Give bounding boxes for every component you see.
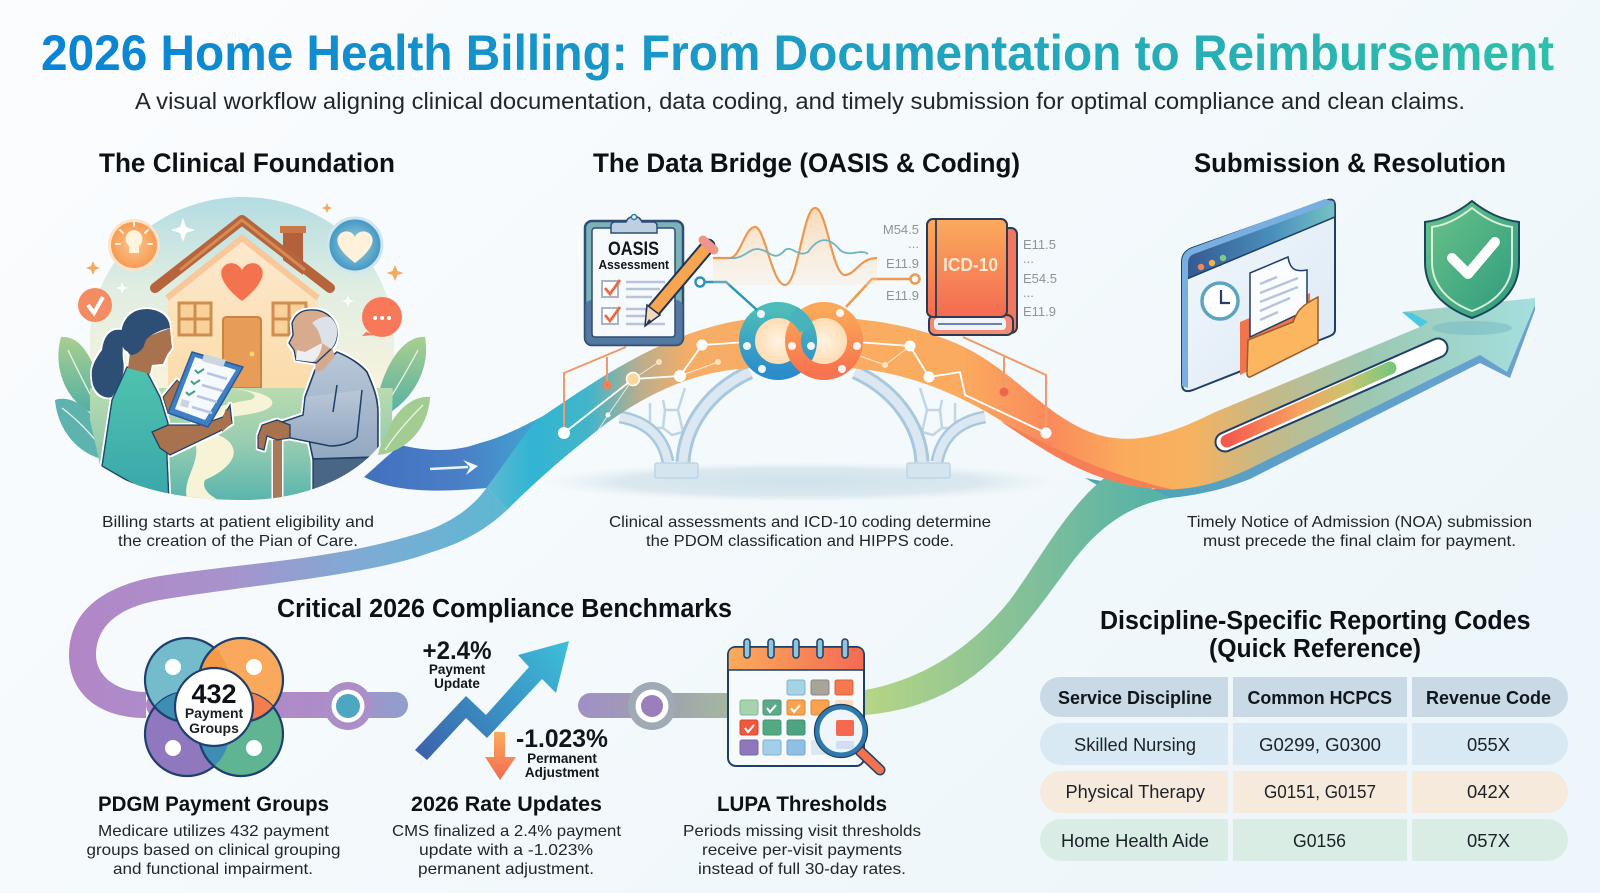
purple connector bar with node: [146, 682, 408, 730]
heading: clinical foundation: The Clinical Foundation: [99, 148, 395, 178]
flow ribbon: from clinical foundation: [364, 415, 545, 491]
heading: reporting codes: Discipline-Specific Reporting Codes: [1100, 607, 1530, 635]
figure: elderly man with cane: [258, 310, 378, 505]
block: PDGM payment groups: groups based on clinical grouping: [86, 842, 340, 859]
icon: down arrow: [485, 732, 516, 780]
heading: reporting codes: (Quick Reference): [1209, 635, 1421, 663]
illustration: data bridge: [558, 208, 1057, 439]
icon: PDGM venn diagram: 432: [191, 679, 237, 709]
block: PDGM payment groups: PDGM Payment Groups: [98, 793, 329, 816]
table row: home health aide: 057X: [1467, 831, 1510, 851]
block: PDGM payment groups: [86, 793, 340, 878]
left code list: M54.5: [883, 222, 919, 237]
waveform: [713, 208, 877, 285]
table row: physical therapy: 042X: [1467, 782, 1510, 802]
block: PDGM payment groups: Medicare utilizes 432 payment: [98, 823, 330, 840]
icon: clock: [1202, 283, 1238, 319]
table: discipline codes: [1040, 677, 1568, 861]
right code list: ...: [1023, 251, 1034, 266]
stat: payment update: +2.4%: [422, 637, 492, 665]
icon: clipboard in nurse's hands: [168, 352, 243, 432]
icon: LUPA calendar with magnifier: [728, 639, 880, 770]
block: 2026 rate updates: update with a -1.023%: [419, 842, 593, 859]
stat: payment update: Payment: [429, 662, 486, 677]
stat: permanent adjustment: -1.023%: [516, 725, 608, 753]
table row: physical therapy: G0151, G0157: [1264, 782, 1376, 802]
left code list: [883, 222, 919, 303]
caption: submission: [1187, 514, 1532, 550]
block: LUPA thresholds: receive per-visit payments: [702, 842, 902, 859]
flow ribbon: green path from LUPA: [865, 470, 1170, 715]
block: 2026 rate updates: CMS finalized a 2.4% payment: [392, 823, 622, 840]
heading: data bridge: The Data Bridge (OASIS & Coding): [593, 148, 1020, 178]
table row: skilled nursing: [1040, 723, 1568, 765]
bridge ground shadow: [540, 462, 1060, 502]
illustration: submission: [1182, 199, 1519, 442]
table header row: Revenue Code: [1426, 688, 1551, 708]
stat: permanent adjustment: [516, 725, 608, 780]
table row: home health aide: G0156: [1293, 831, 1346, 851]
icon: OASIS clipboard: OASIS: [608, 239, 659, 260]
shadow under shield: [1432, 321, 1512, 335]
block: LUPA thresholds: LUPA Thresholds: [717, 793, 887, 816]
progress bar: [1225, 348, 1438, 442]
icon: pencil: [645, 240, 714, 326]
block: 2026 rate updates: permanent adjustment.: [418, 861, 594, 878]
icon: house: [90, 215, 393, 500]
right code list: [1023, 237, 1057, 319]
flow ribbon: return path from bridge to benchmarks: [69, 487, 507, 718]
table row: home health aide: Home Health Aide: [1061, 831, 1209, 851]
table row: physical therapy: [1040, 771, 1568, 813]
flow ribbon: depth edge: [1085, 300, 1535, 500]
node network: [564, 342, 1046, 433]
caption: submission: Timely Notice of Admission (NOA) submission: [1187, 514, 1532, 531]
caption: submission: must precede the final claim for payment.: [1203, 533, 1516, 550]
green connector bar with node: [578, 682, 870, 730]
icon: ICD-10 book: [927, 219, 1017, 335]
right code list: E11.9: [1023, 304, 1056, 319]
bridge right arches: [855, 372, 985, 478]
heading: reporting codes: [1100, 607, 1530, 663]
left code list: E11.9: [886, 256, 919, 271]
orange support lines: [564, 337, 1046, 430]
figure: nurse with clipboard: [92, 309, 232, 500]
flow ribbon: main band with arrow head: [487, 298, 1535, 510]
left code list: E11.9: [886, 288, 919, 303]
table row: home health aide: [1040, 819, 1568, 861]
icon: bubbles and sparkles: [78, 203, 404, 337]
stat: payment update: [422, 637, 492, 691]
block: LUPA thresholds: [683, 793, 921, 878]
icon: ICD-10 book: ICD-10: [943, 255, 998, 275]
table header row: Service Discipline: [1058, 688, 1212, 708]
icon: interlocking rings: [743, 309, 861, 373]
table header row: Common HCPCS: [1248, 688, 1392, 708]
caption: clinical foundation: the creation of the Pian of Care.: [118, 533, 358, 550]
icon: OASIS clipboard: [585, 214, 683, 345]
stat: permanent adjustment: Adjustment: [525, 765, 600, 780]
right code list: ...: [1023, 285, 1034, 300]
scene background dome: [90, 197, 394, 500]
right code list: E11.5: [1023, 237, 1056, 252]
table row: physical therapy: Physical Therapy: [1066, 782, 1205, 802]
icon: PDGM venn diagram: Groups: [189, 720, 239, 736]
caption: data bridge: [609, 514, 991, 550]
caption: data bridge: Clinical assessments and ICD-10 coding determine: [609, 514, 991, 531]
stat: payment update: Update: [434, 676, 480, 691]
table row: skilled nursing: G0299, G0300: [1259, 735, 1381, 755]
table row: skilled nursing: Skilled Nursing: [1074, 735, 1196, 755]
left code list: ...: [908, 236, 919, 251]
block: 2026 rate updates: [392, 793, 622, 878]
heading: submission: Submission & Resolution: [1194, 148, 1506, 178]
caption: clinical foundation: Billing starts at patient eligibility and: [102, 514, 374, 531]
caption: clinical foundation: [102, 514, 374, 550]
block: 2026 rate updates: 2026 Rate Updates: [411, 793, 602, 816]
connectors: [696, 274, 920, 310]
icon: shield with check: [1425, 201, 1519, 318]
table header row: [1040, 677, 1568, 717]
block: LUPA thresholds: instead of full 30-day rates.: [698, 861, 906, 878]
icon: folder with document: [1240, 257, 1318, 377]
icon: PDGM venn diagram: [145, 638, 283, 776]
right code list: E54.5: [1023, 271, 1057, 286]
block: LUPA thresholds: Periods missing visit thresholds: [683, 823, 921, 840]
icon: OASIS clipboard: Assessment: [598, 258, 670, 272]
subtitle: A visual workflow aligning clinical documentation, data coding, and timely submission for optimal compliance and clean claims.: [135, 88, 1465, 114]
table row: skilled nursing: 055X: [1467, 735, 1510, 755]
block: PDGM payment groups: and functional impairment.: [113, 861, 313, 878]
icon: browser window: [1182, 199, 1335, 391]
bridge left arches: [620, 372, 750, 478]
illustration: home visit scene: [55, 197, 430, 510]
icon: plants: [55, 337, 430, 460]
title: 2026 Home Health Billing: From Documentation to Reimbursement: [41, 25, 1554, 81]
caption: data bridge: the PDOM classification and HIPPS code.: [646, 533, 954, 550]
chart: rate update zigzag arrow: [415, 641, 569, 760]
stat: permanent adjustment: Permanent: [527, 751, 597, 766]
heading: compliance benchmarks: Critical 2026 Compliance Benchmarks: [277, 595, 732, 623]
icon: PDGM venn diagram: Payment: [185, 705, 244, 721]
magnifier: [814, 704, 880, 770]
